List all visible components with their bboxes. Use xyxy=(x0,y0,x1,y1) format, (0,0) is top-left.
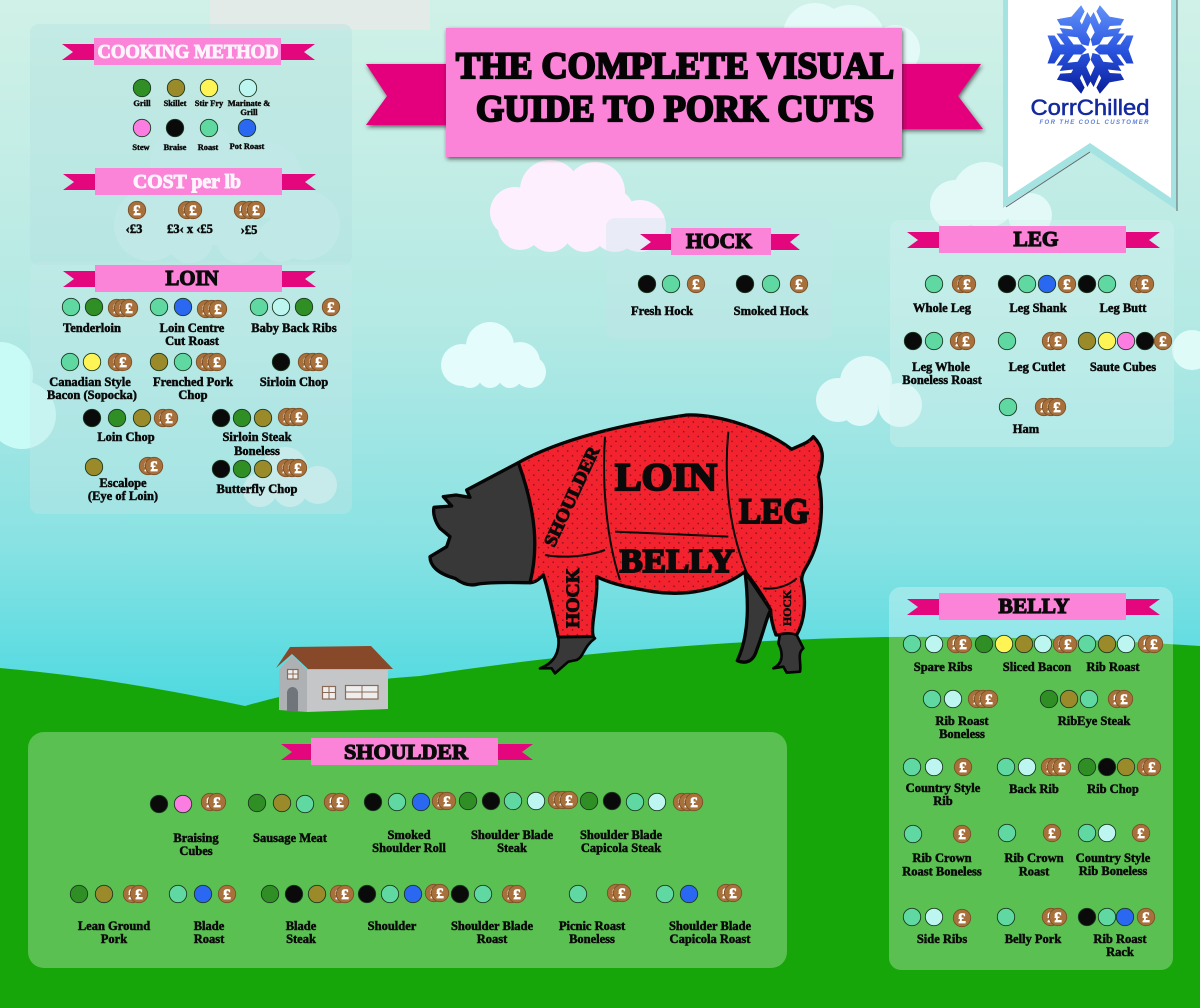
item: Rib Roast: £ xyxy=(1143,637,1151,653)
item: Whole Leg: £ xyxy=(957,277,965,293)
item: Rib Crown Roast: £ xyxy=(1048,826,1056,842)
item: Country Style Rib Boneless: £ xyxy=(1137,826,1145,842)
legend: cost: £ xyxy=(246,203,254,219)
panel: belly xyxy=(902,593,1163,959)
item: Shoulder Blade Steak xyxy=(459,791,578,855)
legend: cost: ›£5 xyxy=(241,223,257,237)
item: Frenched Pork Chop: £ xyxy=(207,355,215,371)
item: Escalope: (Eye of Loin) xyxy=(88,489,158,503)
item: Sliced Bacon xyxy=(975,635,1077,674)
item: Blade Roast: Roast xyxy=(194,932,225,946)
item: Sirloin Chop: £ xyxy=(309,355,317,371)
clouds xyxy=(0,0,1200,507)
item: Saute Cubes: £ xyxy=(1159,334,1167,350)
item: Sirloin Steak Boneless: £ xyxy=(283,410,291,426)
pig label: front hock: HOCK xyxy=(563,568,584,628)
item: Side Ribs: £ xyxy=(958,911,966,927)
legend: cooking methods: Marinate & xyxy=(228,99,270,108)
legend: cost: £ xyxy=(189,203,197,219)
item: Tenderloin: £ xyxy=(125,301,133,317)
item: Shoulder Blade Capicola Steak: £ xyxy=(690,795,698,811)
item: Smoked Hock: £ xyxy=(795,277,803,293)
item: Ham: £ xyxy=(1053,400,1061,416)
item: Spare Ribs: £ xyxy=(959,637,967,653)
item: Shoulder: Shoulder xyxy=(368,919,417,933)
item: Leg Cutlet xyxy=(998,332,1067,374)
item: Baby Back Ribs: £ xyxy=(327,300,335,316)
item: Leg Whole Boneless Roast: £ xyxy=(962,334,970,350)
item: Braising Cubes: Cubes xyxy=(179,844,213,858)
item: Belly Pork: £ xyxy=(1054,910,1062,926)
item: Sirloin Chop: Sirloin Chop xyxy=(260,375,328,389)
item: Blade Roast: £ xyxy=(223,887,231,903)
item: Canadian Style Bacon: £ xyxy=(113,355,121,371)
item: Shoulder Blade Roast: Roast xyxy=(477,932,508,946)
item: Shoulder Blade Capicola Steak: £ xyxy=(678,795,686,811)
cut lines xyxy=(545,432,797,589)
item: Rib Roast Rack: Rib Roast xyxy=(1093,932,1147,946)
sky background xyxy=(0,0,1200,720)
item: Lean Ground Pork: £ xyxy=(128,887,136,903)
item: Sliced Bacon: Sliced Bacon xyxy=(1003,660,1071,674)
item: Leg Butt: £ xyxy=(1135,277,1143,293)
item: Saute Cubes: Saute Cubes xyxy=(1090,360,1156,374)
item: Shoulder Blade Capicola Roast: £ xyxy=(729,886,737,902)
pig head (dark) xyxy=(430,463,535,585)
item: Smoked Shoulder Roll: £ xyxy=(443,794,451,810)
heading: cooking method: COOKING METHOD xyxy=(98,41,278,63)
item: Butterfly Chop: £ xyxy=(294,461,302,477)
item: Rib Roast Rack xyxy=(1078,908,1155,959)
item: Back Rib: £ xyxy=(1058,760,1066,776)
pig label: belly: BELLY xyxy=(620,543,734,580)
item: RibEye Steak: RibEye Steak xyxy=(1058,714,1130,728)
item: Rib Roast Rack: £ xyxy=(1142,910,1150,926)
item: Smoked Hock xyxy=(734,275,808,318)
item: Leg Whole Boneless Roast: £ xyxy=(955,334,963,350)
heading: cost per lb: COST per lb xyxy=(133,171,241,193)
item: Shoulder Blade Roast: £ xyxy=(507,887,515,903)
item: Escalope: £ xyxy=(144,459,152,475)
legend: cooking methods: Stir Fry xyxy=(195,99,224,108)
item: Butterfly Chop: £ xyxy=(288,461,296,477)
item: Country Style Rib: £ xyxy=(959,760,967,776)
item: Tenderloin: Tenderloin xyxy=(63,321,121,335)
item: Tenderloin: £ xyxy=(113,301,121,317)
item: Back Rib: £ xyxy=(1046,760,1054,776)
item: Loin Chop: £ xyxy=(159,411,167,427)
item: Escalope xyxy=(85,457,163,503)
item: Spare Ribs: £ xyxy=(952,637,960,653)
item: Spare Ribs xyxy=(903,635,972,674)
panel: leg xyxy=(902,226,1172,436)
item: Smoked Shoulder Roll: £ xyxy=(437,794,445,810)
item: Shoulder Blade Steak: £ xyxy=(559,793,567,809)
item: Country Style Rib: Country Style xyxy=(906,781,980,795)
item: Lean Ground Pork xyxy=(70,885,150,946)
item: Belly Pork xyxy=(997,908,1067,946)
pig label: rear hock: HOCK xyxy=(780,589,794,626)
item: Smoked Hock: Smoked Hock xyxy=(734,304,808,318)
item: Belly Pork: Belly Pork xyxy=(1005,932,1061,946)
item: Loin Centre Cut Roast: Cut Roast xyxy=(165,334,220,348)
item: Rib Crown Roast xyxy=(998,824,1064,878)
item: RibEye Steak: £ xyxy=(1120,692,1128,708)
item: Rib Chop: £ xyxy=(1148,760,1156,776)
item: Rib Roast: Rib Roast xyxy=(1086,660,1140,674)
item: Sirloin Chop xyxy=(260,353,328,389)
item: Shoulder Blade Capicola Steak: Capicola Steak xyxy=(581,841,661,855)
logo tagline: FOR THE COOL CUSTOMER xyxy=(1040,120,1149,126)
item: Smoked Shoulder Roll xyxy=(364,792,456,855)
pig label: leg: LEG xyxy=(739,491,809,531)
item: Leg Shank: £ xyxy=(1063,277,1071,293)
item: Braising Cubes: £ xyxy=(206,795,214,811)
legend: cooking methods xyxy=(132,79,270,152)
item: Sirloin Steak Boneless: £ xyxy=(289,410,297,426)
item: Rib Roast Rack: Rack xyxy=(1106,945,1134,959)
heading: hock xyxy=(640,228,800,255)
item: Frenched Pork Chop: Frenched Pork xyxy=(153,375,233,389)
item: Picnic Roast Boneless: £ xyxy=(618,886,626,902)
item: Canadian Style Bacon: Bacon (Sopocka) xyxy=(47,388,137,402)
item: Shoulder Blade Capicola Steak: £ xyxy=(684,795,692,811)
icon: snowflake xyxy=(1048,5,1134,94)
item: Blade Steak: Steak xyxy=(286,932,316,946)
item: Sausage Meat xyxy=(248,793,349,845)
item: Braising Cubes: £ xyxy=(213,795,221,811)
item: Rib Roast Boneless: £ xyxy=(973,692,981,708)
legend: cost: £ xyxy=(133,203,141,219)
item: Baby Back Ribs: Baby Back Ribs xyxy=(251,321,337,335)
item: Rib Roast Boneless xyxy=(923,690,998,741)
item: Country Style Rib Boneless: Country Style xyxy=(1076,851,1150,865)
item: Escalope: Escalope xyxy=(99,476,147,490)
item: Frenched Pork Chop xyxy=(150,353,233,402)
item: Shoulder xyxy=(358,884,449,933)
item: Shoulder Blade Capicola Roast: £ xyxy=(722,886,730,902)
item: Leg Cutlet: Leg Cutlet xyxy=(1009,360,1066,374)
logo wordmark: CorrChilled xyxy=(1030,95,1150,120)
item: Leg Cutlet: £ xyxy=(1054,334,1062,350)
heading: loin: LOIN xyxy=(166,266,218,290)
pig label: shoulder: SHOULDER xyxy=(540,442,604,550)
pig diagram xyxy=(430,415,822,673)
item: Back Rib: £ xyxy=(1052,760,1060,776)
item: Braising Cubes: Braising xyxy=(173,831,219,845)
item: Shoulder Blade Roast: Shoulder Blade xyxy=(451,919,533,933)
item: Butterfly Chop: Butterfly Chop xyxy=(217,482,297,496)
title banner: GUIDE TO PORK CUTS xyxy=(476,89,874,130)
item: Side Ribs: Side Ribs xyxy=(917,932,967,946)
item: Canadian Style Bacon: £ xyxy=(119,355,127,371)
item: Belly Pork: £ xyxy=(1047,910,1055,926)
legend: cooking methods: Stew xyxy=(132,143,150,152)
legend: cost: £ xyxy=(183,203,191,219)
item: Sirloin Steak Boneless xyxy=(212,408,308,458)
pig label: loin: LOIN xyxy=(615,456,717,499)
item: Ham xyxy=(999,398,1066,436)
heading: cost per lb xyxy=(63,168,316,195)
legend: cost: £3‹ x ‹£5 xyxy=(167,222,213,236)
heading: leg xyxy=(907,226,1160,253)
item: Rib Crown Roast Boneless: Rib Crown xyxy=(912,851,972,865)
item: Tenderloin: £ xyxy=(119,301,127,317)
item: Canadian Style Bacon: Canadian Style xyxy=(49,375,131,389)
item: Rib Crown Roast Boneless xyxy=(902,825,982,878)
item: Shoulder: £ xyxy=(430,886,438,902)
item: Leg Whole Boneless Roast: Leg Whole xyxy=(912,360,970,374)
item: Blade Roast: Blade xyxy=(194,919,224,933)
item: Picnic Roast Boneless: Picnic Roast xyxy=(559,919,625,933)
item: Shoulder Blade Capicola Roast: Capicola Roast xyxy=(670,932,751,946)
item: Leg Whole Boneless Roast: Boneless Roast xyxy=(902,373,983,387)
rear hoof xyxy=(773,633,803,673)
item: Shoulder Blade Steak: £ xyxy=(565,793,573,809)
item: Rib Roast xyxy=(1078,635,1163,674)
item: Blade Steak: Blade xyxy=(286,919,316,933)
legend: cooking methods: Grill xyxy=(133,99,151,108)
item: Lean Ground Pork: Pork xyxy=(101,932,127,946)
item: Ham: Ham xyxy=(1013,422,1040,436)
heading: leg: LEG xyxy=(1014,227,1058,251)
item: Shoulder Blade Roast: £ xyxy=(513,887,521,903)
item: Shoulder Blade Steak: £ xyxy=(553,793,561,809)
item: Country Style Rib: Rib xyxy=(933,794,953,808)
item: Picnic Roast Boneless: Boneless xyxy=(569,932,615,946)
item: Loin Centre Cut Roast: £ xyxy=(214,302,222,318)
item: Loin Centre Cut Roast xyxy=(150,298,227,348)
item: Leg Butt: Leg Butt xyxy=(1100,301,1147,315)
item: Fresh Hock: £ xyxy=(692,277,700,293)
logo bookmark xyxy=(1003,0,1177,211)
item: Rib Roast Boneless: Rib Roast xyxy=(935,714,989,728)
legend: cooking methods: Braise xyxy=(164,143,187,152)
item: Leg Whole Boneless Roast xyxy=(902,332,983,387)
legend: cost: £ xyxy=(252,203,260,219)
front hoof xyxy=(540,637,595,673)
item: Side Ribs xyxy=(903,908,971,946)
heading: loin xyxy=(63,265,316,292)
item: Rib Roast Boneless: Boneless xyxy=(939,727,985,741)
item: Country Style Rib Boneless xyxy=(1076,824,1151,878)
house xyxy=(276,646,393,712)
item: Loin Centre Cut Roast: Loin Centre xyxy=(160,321,224,335)
item: Shoulder Blade Capicola Steak xyxy=(580,792,703,855)
item: Canadian Style Bacon xyxy=(47,353,137,402)
item: Butterfly Chop xyxy=(212,459,307,496)
item: Rib Crown Roast: Rib Crown xyxy=(1004,851,1064,865)
heading: belly xyxy=(907,593,1160,620)
legend: cooking methods: Skillet xyxy=(164,99,187,108)
item: Sirloin Chop: £ xyxy=(303,355,311,371)
item: Blade Steak xyxy=(261,885,354,946)
legend: cooking methods: Grill xyxy=(240,108,258,117)
item: Sliced Bacon: £ xyxy=(1058,637,1066,653)
item: Braising Cubes xyxy=(150,793,226,858)
item: Rib Crown Roast Boneless: £ xyxy=(958,827,966,843)
item: Sausage Meat: £ xyxy=(329,795,337,811)
heading: shoulder xyxy=(281,738,533,765)
item: Shoulder Blade Capicola Roast xyxy=(656,884,751,946)
item: Shoulder Blade Steak: Steak xyxy=(497,841,527,855)
pig body (red) xyxy=(518,415,822,637)
panel: shoulder xyxy=(70,738,751,946)
item: Rib Roast: £ xyxy=(1150,637,1158,653)
item: Blade Steak: £ xyxy=(335,887,343,903)
item: Rib Crown Roast Boneless: Roast Boneless xyxy=(902,864,982,878)
item: Baby Back Ribs xyxy=(250,298,340,335)
title banner xyxy=(366,28,983,157)
item: Rib Chop: Rib Chop xyxy=(1087,782,1139,796)
item: Leg Shank xyxy=(998,275,1076,315)
item: Sirloin Steak Boneless: Sirloin Steak xyxy=(222,430,292,444)
item: Picnic Roast Boneless: £ xyxy=(612,886,620,902)
item: Rib Chop: £ xyxy=(1142,760,1150,776)
item: Country Style Rib Boneless: Rib Boneless xyxy=(1079,864,1147,878)
item: Rib Crown Roast: Roast xyxy=(1019,864,1050,878)
item: Frenched Pork Chop: Chop xyxy=(178,388,208,402)
item: Escalope: £ xyxy=(150,459,158,475)
item: Rib Roast Boneless: £ xyxy=(979,692,987,708)
item: Leg Shank: Leg Shank xyxy=(1009,301,1067,315)
item: RibEye Steak xyxy=(1040,690,1133,728)
item: Tenderloin xyxy=(62,298,138,335)
item: Leg Butt xyxy=(1078,275,1154,315)
legend: cooking methods: Pot Roast xyxy=(230,142,265,151)
heading: hock: HOCK xyxy=(686,229,753,253)
heading: cooking method xyxy=(62,38,315,65)
item: Whole Leg: Whole Leg xyxy=(913,301,972,315)
legend: cooking methods: Roast xyxy=(198,143,218,152)
item: Smoked Shoulder Roll: Shoulder Roll xyxy=(372,841,446,855)
item: Frenched Pork Chop: £ xyxy=(213,355,221,371)
item: Ham: £ xyxy=(1047,400,1055,416)
panel: loin xyxy=(47,265,340,503)
item: Lean Ground Pork: Lean Ground xyxy=(78,919,150,933)
legend: cost: ‹£3 xyxy=(126,222,142,236)
item: Blade Roast xyxy=(169,885,236,946)
item: Country Style Rib xyxy=(903,758,981,808)
item: Shoulder Blade Roast xyxy=(451,885,533,946)
item: Whole Leg xyxy=(913,275,976,315)
item: Spare Ribs: Spare Ribs xyxy=(914,660,972,674)
item: Back Rib: Back Rib xyxy=(1009,782,1059,796)
item: Shoulder Blade Steak: Shoulder Blade xyxy=(471,828,553,842)
item: Picnic Roast Boneless xyxy=(559,884,631,946)
item: Sausage Meat: £ xyxy=(336,795,344,811)
item: Rib Roast Boneless: £ xyxy=(985,692,993,708)
heading: belly: BELLY xyxy=(998,594,1070,618)
panel: hock xyxy=(631,228,808,318)
item: Sausage Meat: Sausage Meat xyxy=(253,831,328,845)
item: Sliced Bacon: £ xyxy=(1064,637,1072,653)
item: Loin Chop: Loin Chop xyxy=(97,430,155,444)
item: Ham: £ xyxy=(1040,400,1048,416)
item: Loin Centre Cut Roast: £ xyxy=(202,302,210,318)
item: Whole Leg: £ xyxy=(963,277,971,293)
item: Sirloin Chop: £ xyxy=(315,355,323,371)
item: Loin Chop xyxy=(83,409,178,444)
back leg (dark) xyxy=(737,572,771,662)
item: Fresh Hock: Fresh Hock xyxy=(631,304,693,318)
heading: shoulder: SHOULDER xyxy=(344,740,469,764)
item: Leg Cutlet: £ xyxy=(1047,334,1055,350)
item: Sirloin Steak Boneless: £ xyxy=(295,410,303,426)
item: Sirloin Steak Boneless: Boneless xyxy=(234,444,280,458)
green hills xyxy=(0,637,1200,1008)
item: Fresh Hock xyxy=(631,275,705,318)
title banner: THE COMPLETE VISUAL xyxy=(456,46,894,87)
item: Blade Steak: £ xyxy=(341,887,349,903)
item: Leg Butt: £ xyxy=(1141,277,1149,293)
item: Smoked Shoulder Roll: Smoked xyxy=(387,828,431,842)
item: Shoulder Blade Capicola Roast: Shoulder Blade xyxy=(669,919,751,933)
item: Saute Cubes xyxy=(1078,332,1172,374)
item: Shoulder Blade Capicola Steak: Shoulder Blade xyxy=(580,828,662,842)
legend: cost: £ xyxy=(239,203,247,219)
item: Back Rib xyxy=(997,758,1071,796)
item: Loin Chop: £ xyxy=(165,411,173,427)
item: Rib Chop xyxy=(1078,758,1161,796)
item: Loin Centre Cut Roast: £ xyxy=(208,302,216,318)
item: Shoulder: £ xyxy=(436,886,444,902)
item: Butterfly Chop: £ xyxy=(282,461,290,477)
legend: cost xyxy=(126,201,265,237)
item: Lean Ground Pork: £ xyxy=(135,887,143,903)
item: Frenched Pork Chop: £ xyxy=(201,355,209,371)
item: RibEye Steak: £ xyxy=(1113,692,1121,708)
